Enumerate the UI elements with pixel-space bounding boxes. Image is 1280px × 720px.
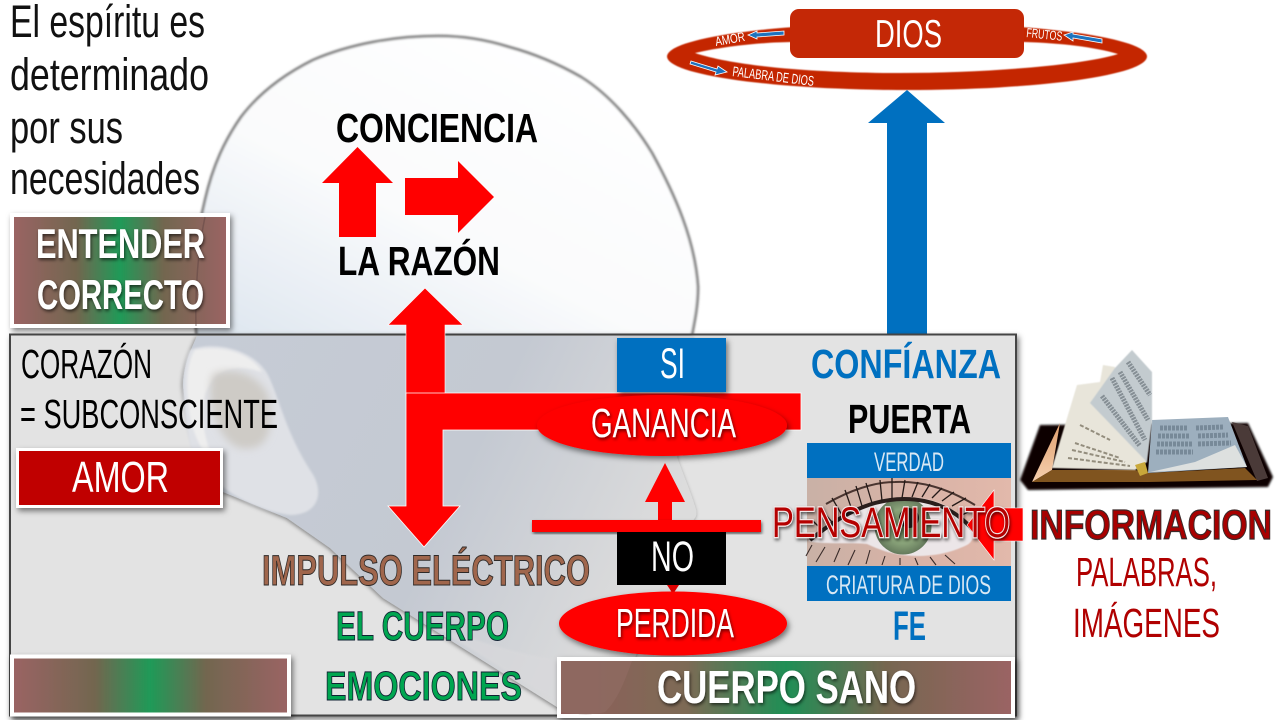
oval: perdida <box>559 592 787 656</box>
iris <box>874 498 932 554</box>
perdida text: PERDIDA <box>616 600 734 646</box>
eye panel <box>806 443 1011 601</box>
label: puerta: PUERTA <box>848 396 971 442</box>
head edge through box <box>196 217 205 326</box>
palabra de dios label: PALABRA DE DIOS <box>732 63 815 89</box>
neck through box <box>561 661 632 714</box>
amor text: AMOR <box>72 453 169 502</box>
label: fe: FE <box>893 603 926 649</box>
title text: necesidades <box>10 153 200 204</box>
bar: horizontal divider <box>532 520 761 532</box>
jaw highlight <box>420 618 630 708</box>
ganancia text: GANANCIA <box>591 400 736 446</box>
right page bright patch <box>1150 445 1247 472</box>
criatura text: CRIATURA DE DIOS <box>826 570 991 600</box>
arrow: right <box>405 161 494 233</box>
ring ellipse <box>667 23 1147 90</box>
si text: SI <box>660 340 685 388</box>
turning leaf lines <box>1102 362 1150 446</box>
arrow down to impulso <box>388 393 801 547</box>
label: la razon: LA RAZÓN <box>338 238 500 284</box>
box: cuerpo sano <box>559 659 1013 716</box>
eye photo <box>806 478 1011 566</box>
icon: open bible <box>1020 350 1273 490</box>
oval: ganancia <box>537 395 787 456</box>
amor label: AMOR <box>714 29 746 49</box>
arrow tip: below no <box>667 585 679 594</box>
head inside panel <box>183 336 696 712</box>
lids <box>810 499 973 540</box>
frutos label: FRUTOS <box>1026 25 1063 44</box>
amor arrow <box>748 31 784 39</box>
dios box <box>790 9 1024 58</box>
arrow: blue up to dios <box>868 90 945 336</box>
box: entender correcto <box>12 215 228 326</box>
cuerpo sano text: CUERPO SANO <box>657 661 916 713</box>
ear <box>183 346 318 515</box>
back leaves <box>1052 365 1147 470</box>
title text: por sus <box>10 102 123 153</box>
box: no <box>617 532 726 585</box>
entender text: ENTENDER <box>36 220 205 267</box>
label: el cuerpo: EL CUERPO <box>336 603 509 649</box>
arrow: information to thought <box>967 490 1023 560</box>
head silhouette <box>195 36 698 340</box>
arrow: up to conciencia <box>322 147 393 237</box>
box: amor <box>18 450 222 506</box>
right page <box>1148 417 1247 473</box>
label: palabras imagenes <box>1073 549 1220 646</box>
no text: NO <box>651 533 694 581</box>
label: corazon subconsciente <box>20 341 278 437</box>
correcto text: CORRECTO <box>37 271 204 318</box>
ring: dios <box>667 9 1147 90</box>
verdad text: VERDAD <box>874 447 944 477</box>
page block <box>1032 468 1257 482</box>
panel: corazon <box>10 334 1016 716</box>
label: impulso electrico: IMPULSO ELÉCTRICO <box>262 547 590 595</box>
verdad bar <box>807 443 1011 478</box>
turning leaf <box>1090 350 1152 462</box>
eye white <box>808 498 974 556</box>
dios text: DIOS <box>875 13 942 56</box>
title text <box>10 0 209 204</box>
frutos arrow <box>1064 32 1102 43</box>
box: empty gradient <box>12 656 289 714</box>
right edge <box>1232 422 1268 481</box>
crease <box>826 482 975 505</box>
criatura bar <box>807 566 1011 601</box>
palabra arrow <box>690 61 727 75</box>
left page edge <box>1032 423 1060 482</box>
pupil <box>899 508 919 528</box>
ribbon <box>1135 462 1148 476</box>
ear rim <box>187 348 262 465</box>
box: si <box>617 338 726 392</box>
back leaves lines <box>1068 425 1130 466</box>
label: confianza: CONFÍANZA <box>811 341 1001 387</box>
upper lashes <box>812 478 976 530</box>
ear inner shadow <box>210 371 271 448</box>
right page lines <box>1156 427 1231 452</box>
cover <box>1020 423 1273 490</box>
lower lashes <box>806 545 955 565</box>
label: emociones: EMOCIONES <box>325 663 522 709</box>
arrow: red t-structure <box>388 288 801 547</box>
label: conciencia: CONCIENCIA <box>336 105 538 151</box>
label: pensamiento: PENSAMIENTO <box>772 499 1010 547</box>
arrow: up to ganancia <box>645 463 685 522</box>
title text: determinado <box>10 49 209 100</box>
arrow up to la razon <box>388 288 463 395</box>
label: corazon subconsciente: CORAZÓN <box>21 341 152 387</box>
label: corazon subconsciente: = SUBCONSCIENTE <box>20 391 278 437</box>
